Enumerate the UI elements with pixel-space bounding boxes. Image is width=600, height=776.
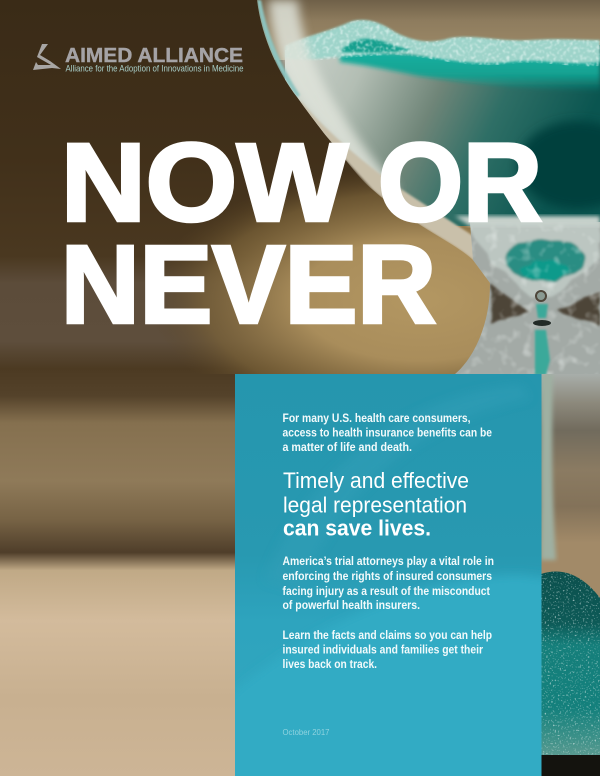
logo tagline: Alliance for the Adoption of Innovations in Medicine: [66, 64, 244, 74]
logo name: AIMED ALLIANCE: [65, 45, 243, 67]
body paragraph one: facing injury as a result of the misconduct: [282, 586, 490, 598]
frame glass base: [450, 220, 600, 376]
intro text: access to health insurance benefits can be: [282, 428, 492, 440]
title: NEVER: [61, 224, 436, 346]
panel photo tint: [371, 576, 542, 616]
sparkle grain: [302, 20, 600, 66]
title: OR: [378, 122, 542, 244]
dark crease in crest: [342, 39, 412, 53]
body paragraph two: Learn the facts and claims so you can help: [282, 630, 492, 642]
falling sand stream: [535, 304, 550, 375]
glass edge right strip: [541, 374, 556, 560]
panel: teal text panel: [225, 374, 560, 776]
sand in neck, funnel: [462, 222, 600, 326]
body paragraph two: lives back on track.: [282, 659, 377, 671]
callout heading: can save lives.: [283, 516, 431, 540]
callout heading: Timely and effective: [283, 468, 469, 493]
glass rim base: [300, 100, 489, 282]
body paragraph one: of powerful health insurers.: [282, 600, 420, 612]
glass vertical highlight: [268, 0, 400, 190]
teal rim line: [257, 0, 300, 97]
glass bright seam: [455, 216, 600, 226]
glass curve inside panel: [265, 385, 530, 590]
body paragraph one: enforcing the rights of insured consumers: [282, 571, 492, 583]
funnel sand: [505, 239, 585, 281]
body paragraph two: insured individuals and families get their: [282, 644, 483, 656]
title: [61, 122, 542, 346]
upper bulb: [250, 0, 600, 283]
neck opening ring: [536, 291, 546, 301]
frame dark patches: [490, 282, 600, 326]
teal sand band: [340, 52, 600, 92]
bulb tan top: [250, 0, 600, 60]
neck and lower bulb silver glass: [450, 220, 600, 376]
title: NOW: [61, 122, 348, 244]
intro text: For many U.S. health care consumers,: [282, 413, 470, 425]
neck dark pinch: [533, 320, 551, 326]
sand crest sparkle: [285, 20, 600, 63]
icon: logo mark: [33, 44, 61, 70]
callout heading: legal representation: [283, 492, 467, 518]
date: October 2017: [282, 727, 330, 737]
silver highlights: [466, 226, 600, 374]
lower sand pile: [541, 566, 600, 776]
sand mound inside panel: [371, 576, 542, 616]
logo: Aimed Alliance: [33, 44, 244, 74]
right strip background: [542, 374, 600, 776]
body paragraph one: America’s trial attorneys play a vital role in: [282, 556, 494, 568]
bright sand core: [521, 260, 569, 280]
hourglass photo: [250, 0, 600, 776]
intro text: a matter of life and death.: [282, 442, 412, 454]
bulb sand body: [285, 45, 600, 226]
deep teal shadow: [518, 121, 600, 209]
funnel light glass: [462, 222, 600, 297]
